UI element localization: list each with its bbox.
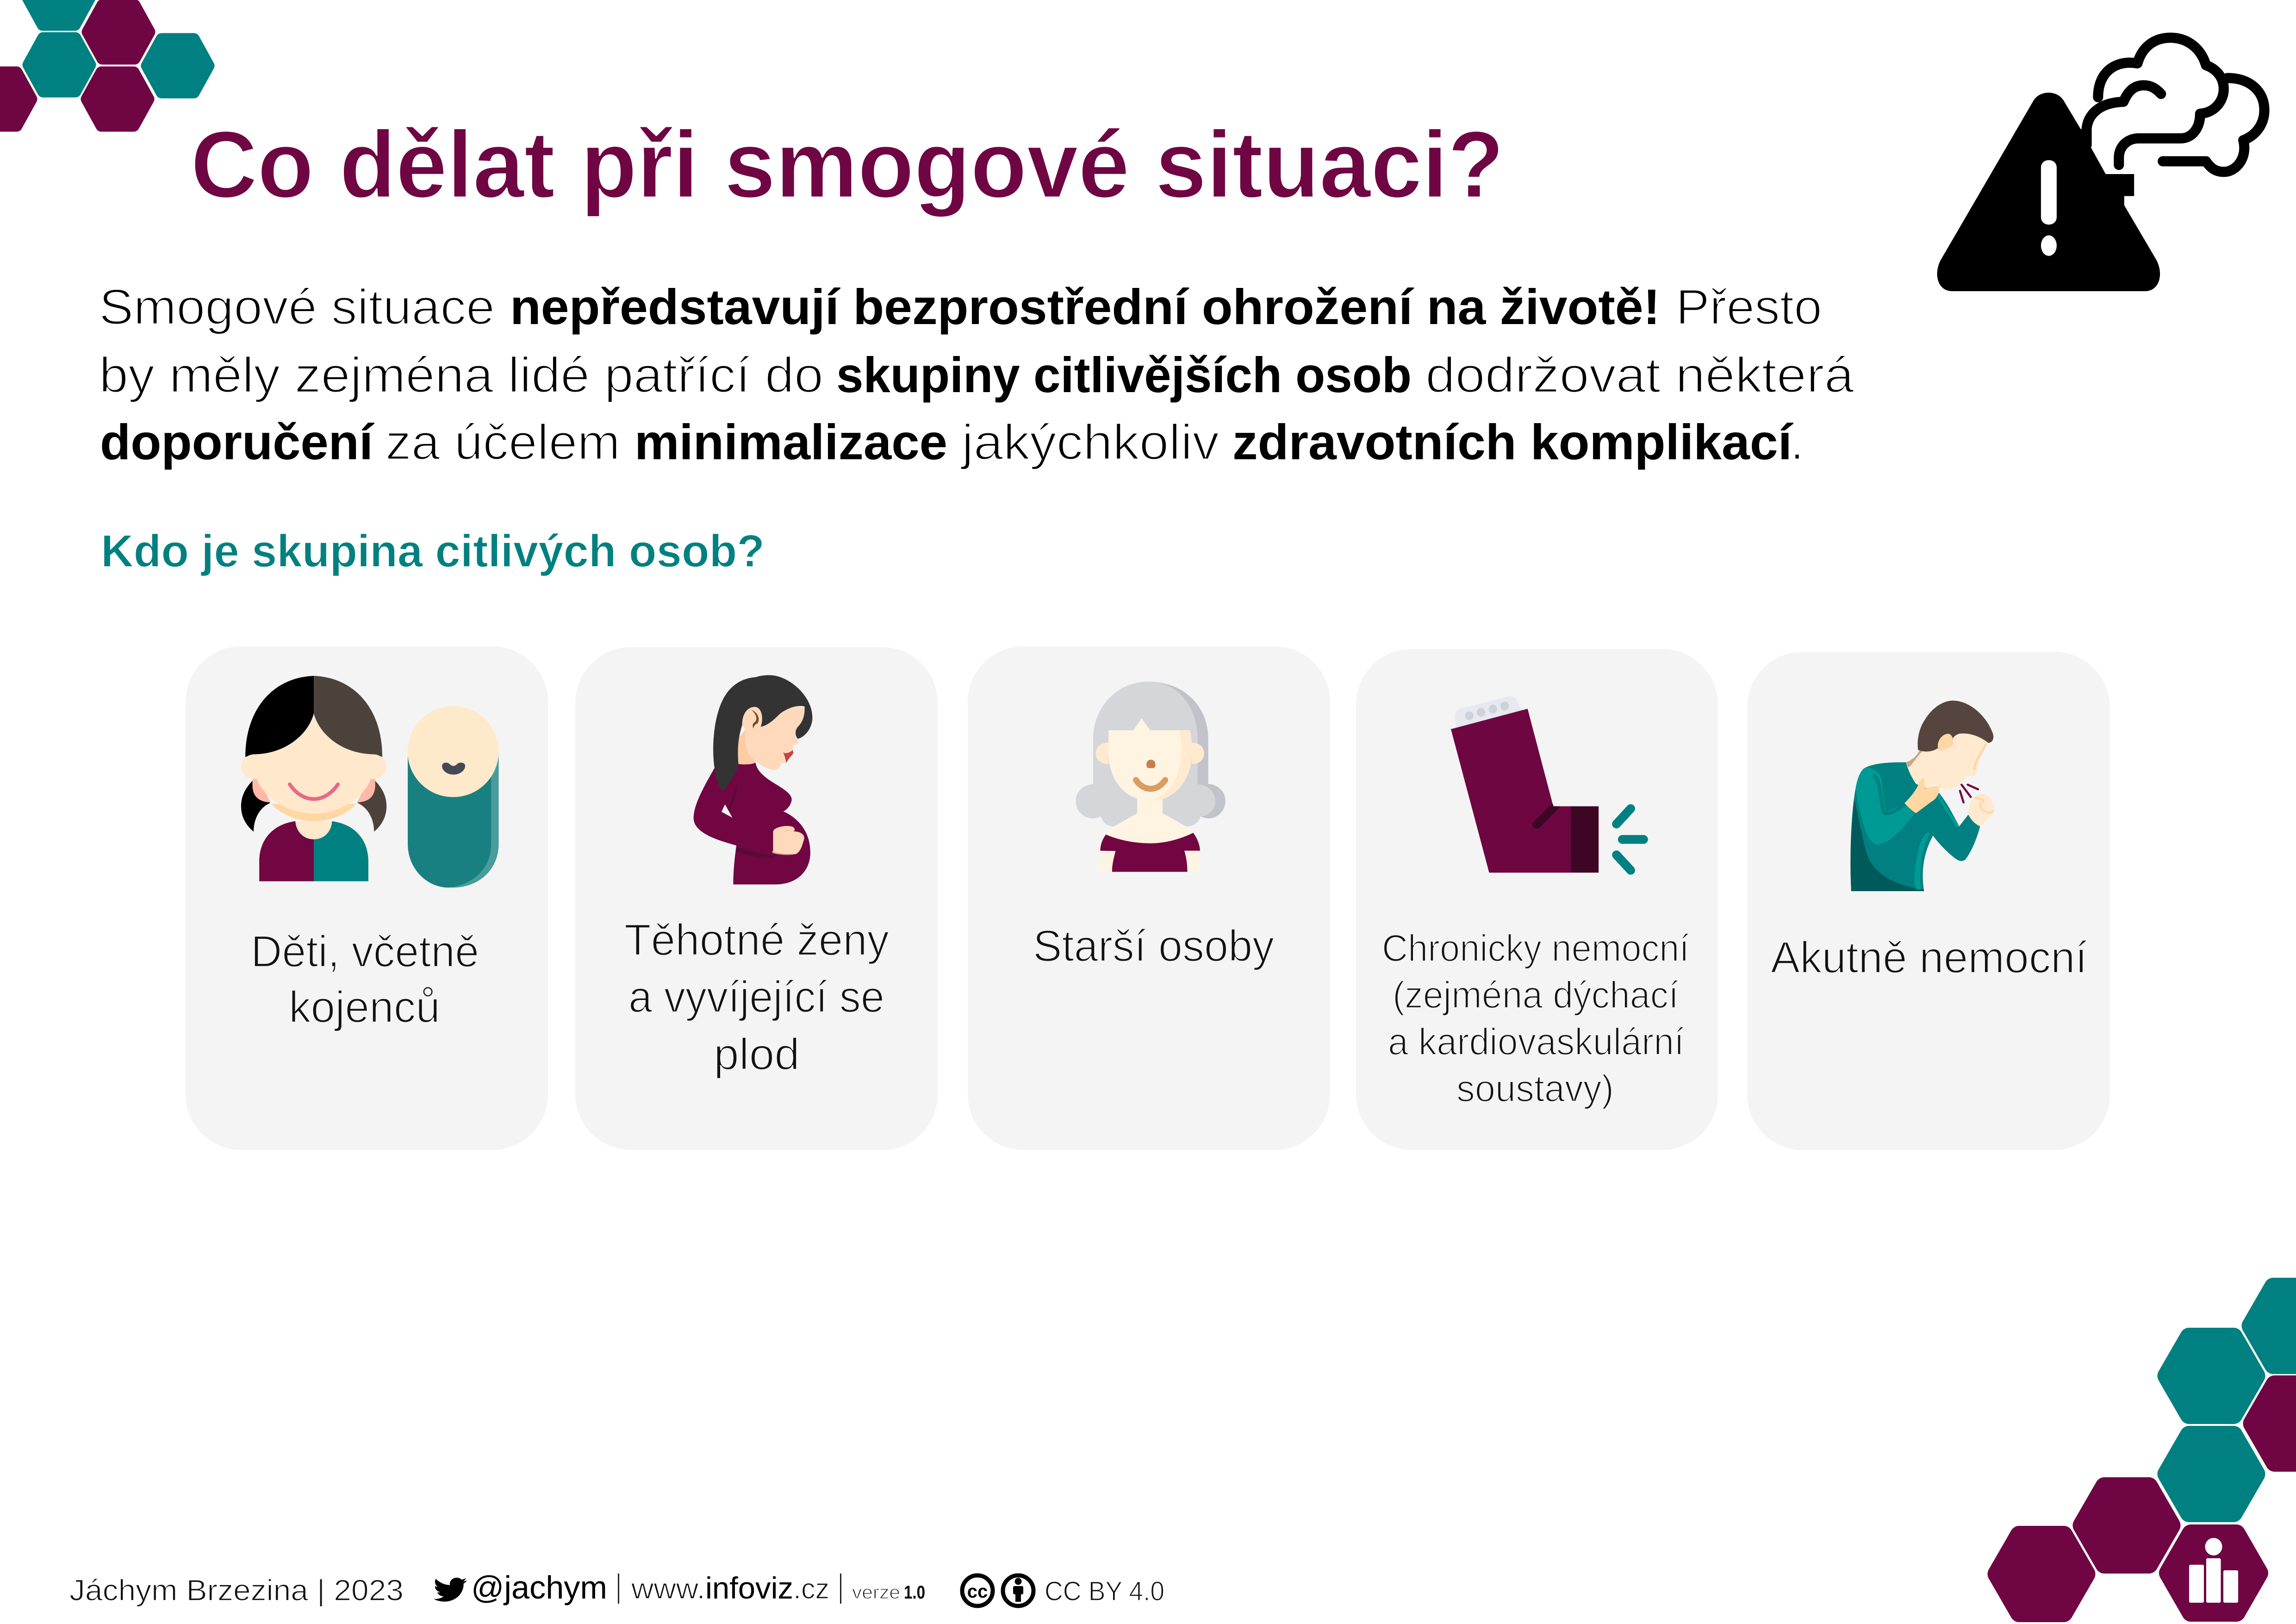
version: verze <box>852 1582 900 1603</box>
icon: girl and baby <box>241 676 499 887</box>
label: pregnant women: a vyvíjející se <box>628 972 884 1022</box>
panel: elderly <box>968 646 1330 1150</box>
version <box>852 1582 925 1603</box>
intro paragraph <box>99 279 1854 470</box>
label: children: kojenců <box>289 982 440 1032</box>
panel: pregnant women <box>575 647 938 1150</box>
label: pregnant women: plod <box>714 1030 800 1079</box>
intro paragraph: minimalizace <box>635 414 947 470</box>
author credit: Jáchym Brzezina | 2023 <box>69 1574 404 1607</box>
intro paragraph: by měly zejména lidé patřící do <box>99 347 823 403</box>
label: chronically ill: Chronicky nemocní <box>1382 927 1689 969</box>
intro paragraph: Přesto <box>1676 279 1822 335</box>
label: children: Děti, včetně <box>251 927 479 976</box>
title: Co dělat při smogové situaci? <box>191 112 1504 218</box>
icon: bird <box>434 1578 467 1602</box>
footer <box>69 1569 1164 1607</box>
separator and website: .cz <box>793 1573 829 1605</box>
icon: pregnant woman <box>694 675 812 884</box>
intro paragraph: zdravotních komplikací <box>1232 414 1793 470</box>
version: 1.0 <box>904 1582 925 1603</box>
panel: acutely ill <box>1747 652 2110 1150</box>
intro paragraph: za účelem <box>386 414 620 470</box>
label: pregnant women <box>624 915 889 1079</box>
icon: smog warning triangle with smoke <box>1937 38 2265 291</box>
icon: CC: cc <box>967 1581 988 1602</box>
panel: children and infants <box>186 646 548 1150</box>
intro paragraph: nepředstavují bezprostřední ohrožení na životě! <box>510 279 1660 335</box>
handle: @jachym <box>471 1569 607 1605</box>
icon: inhaler <box>1451 696 1643 873</box>
separator and website <box>618 1571 841 1605</box>
label: chronically ill: soustavy) <box>1456 1068 1614 1110</box>
label: chronically ill: (zejména dýchací <box>1393 974 1679 1016</box>
icon: BY person <box>1003 1575 1033 1606</box>
intro paragraph: jakýchkoliv <box>960 414 1219 470</box>
license: CC BY 4.0 <box>1045 1576 1164 1606</box>
label: chronically ill <box>1382 927 1689 1110</box>
panel: chronically ill <box>1356 649 1718 1150</box>
icon: coughing man <box>1850 700 1994 891</box>
icon: elderly woman <box>1076 681 1226 872</box>
intro paragraph: doporučení <box>100 414 374 470</box>
separator and website: www. <box>631 1573 705 1605</box>
subheading: Kdo je skupina citlivých osob? <box>101 525 765 576</box>
intro paragraph: . <box>1790 414 1804 470</box>
hexagon decoration: top left <box>0 0 209 126</box>
icon: CC <box>962 1575 993 1606</box>
label: elderly: Starší osoby <box>1033 921 1274 971</box>
label: acutely ill: Akutně nemocní <box>1771 933 2087 982</box>
label: children <box>251 927 479 1032</box>
hexagon decoration with logo: bottom right <box>1997 1287 2296 1613</box>
intro paragraph: Smogové situace <box>99 279 495 335</box>
logo: info bars <box>2189 1538 2238 1603</box>
label: chronically ill: a kardiovaskulární <box>1388 1021 1684 1063</box>
intro paragraph: dodržovat některá <box>1425 347 1854 403</box>
separator and website: infoviz <box>705 1571 793 1605</box>
intro paragraph: skupiny citlivějších osob <box>836 347 1412 403</box>
label: pregnant women: Těhotné ženy <box>624 915 889 965</box>
